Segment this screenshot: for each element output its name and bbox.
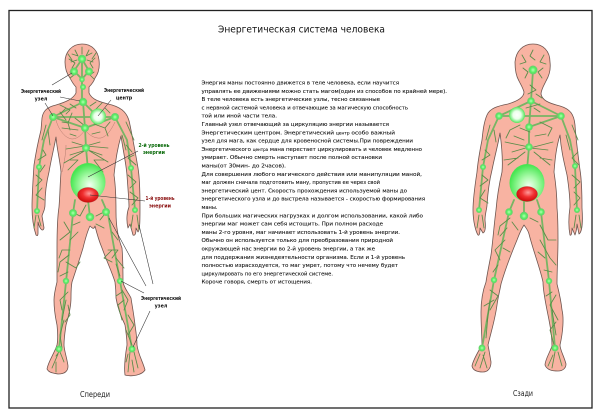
second energy level: front — [70, 163, 106, 201]
figure: back view — [472, 44, 582, 372]
body text: Энергия маны постоянно движется в теле человека, если научится — [202, 80, 399, 86]
caption: back: Сзади — [513, 389, 533, 398]
energy center: front — [90, 108, 106, 124]
body text: узел для мага, как сердце для кровеносной системы.При повреждении — [202, 138, 413, 145]
body text: маны(от 30мин- до 2часов). — [202, 164, 286, 170]
leader lines — [45, 73, 153, 347]
label: energy node bottom — [141, 295, 181, 310]
body outline: back — [472, 44, 582, 372]
body text: для поддержания жизнедеятельности организма. Если и 1-й уровень — [202, 254, 405, 261]
body text: циркулировать по его энергетической системе. — [202, 270, 333, 277]
figure: front view — [32, 44, 145, 376]
label: energy center: Энергетический — [104, 87, 144, 94]
label: energy node top left — [21, 88, 61, 102]
body text: В теле человека есть энергетические узлы, тесно связанные — [202, 97, 381, 103]
label: first level — [146, 195, 174, 210]
label: energy center: центр — [116, 96, 133, 102]
body text: Главный узел отвечающий за циркуляцию энергии называется — [202, 121, 389, 128]
energy channels: back main — [479, 70, 577, 348]
caption: front: Спереди — [80, 390, 110, 399]
first energy level: front — [78, 188, 98, 202]
label: second level — [138, 142, 170, 156]
body text: При больших магических нагрузках и долгом использовании, какой либо — [202, 212, 424, 219]
energy nodes: back — [476, 66, 580, 352]
body text — [202, 80, 447, 286]
chest contour lines: front — [56, 120, 115, 172]
body text: Обычно он используется только для преобразования природной — [202, 237, 393, 244]
energy nodes: front — [34, 55, 138, 353]
first energy level: back — [516, 186, 538, 202]
label: energy node bottom: Энергетический — [141, 295, 181, 302]
body text: той или иной части тела. — [202, 113, 277, 120]
energy center: back — [509, 107, 525, 123]
label: energy node bottom: узел — [155, 304, 168, 310]
label: first level: 1-й уровень — [146, 195, 174, 202]
body text: Энергетическим центром. Энергетический центр особо важный — [202, 129, 395, 136]
label: second level: энергии — [143, 151, 165, 156]
body text: энергетический цент. Скорость прохождения используемой маны до — [202, 187, 408, 194]
label: energy node top left: Энергетический — [21, 88, 61, 95]
title: Энергетическая система человека — [218, 24, 385, 36]
body text: окружающей нас энергии во 2-й уровень энергии, а так же — [202, 246, 376, 252]
body text: Короче говоря, смерть от истощения. — [202, 280, 312, 286]
body text: энергетического узла и до выстрела называется - скоростью формирования — [202, 197, 425, 203]
energy channels: front main — [37, 59, 135, 349]
body text: маны. — [202, 205, 218, 211]
body text: маны 2-го уровня, маг начинает использовать 1-й уровень энергии. — [202, 229, 400, 236]
label: first level: энергии — [149, 204, 171, 210]
body text: умирает. Обычно смерть наступает после полной остановки — [202, 154, 382, 161]
body text: Для совершения любого магического действия или манипуляции маной, — [202, 171, 422, 178]
energy channels: back branches — [475, 50, 581, 368]
body text: полностью израсходуется, то маг умрет, потому что нечему будет — [202, 263, 399, 269]
label: second level: 2-й уровень — [138, 142, 170, 149]
energy channels: front branches — [34, 47, 139, 372]
body text: Энергетического центра мана перестает циркулировать и человек медленно — [202, 147, 423, 153]
label: energy node top left: узел — [35, 98, 48, 102]
body text: управлять ее движениями можно стать магом(один из способов по крайней мере). — [202, 88, 447, 95]
label: energy center — [104, 87, 144, 102]
body text: с нервной системой человека и отвечающие за магическую способность — [202, 104, 408, 111]
second energy level: back — [510, 164, 544, 202]
body outline: front — [32, 44, 145, 376]
body text: маг должен сначала подготовить ману, пропустив ее через свой — [202, 179, 380, 186]
body text: энергии маг может сам себя истощить. При полном расходе — [202, 222, 384, 228]
